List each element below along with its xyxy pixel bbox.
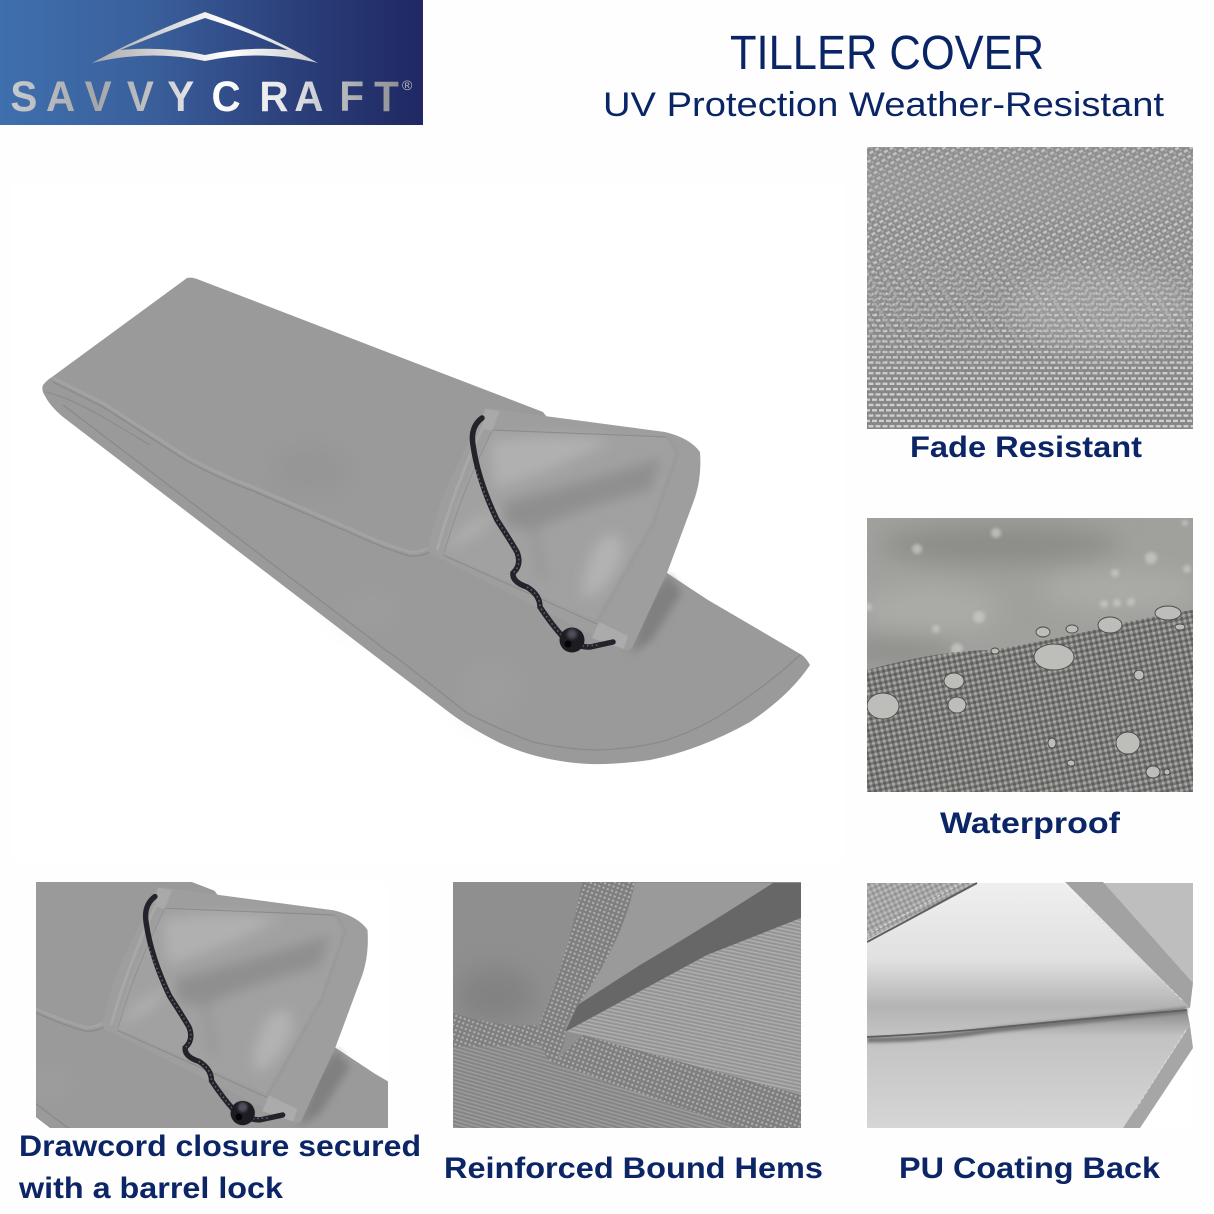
panel: drawcord closure	[18, 882, 419, 1198]
caption: with a barrel lock	[18, 1172, 283, 1205]
panel: fade resistant	[867, 147, 1193, 458]
product image: folded tiller cover	[42, 278, 810, 764]
title: TILLER COVER	[730, 27, 1044, 80]
logo wordmark: SAVVYCRAFT	[10, 72, 399, 120]
photo: droplets on fabric	[840, 518, 1200, 792]
photo: coated interior	[867, 882, 1193, 1128]
panel: PU coating back	[867, 882, 1193, 1185]
photo: hem detail	[453, 882, 801, 1128]
panel: reinforced bound hems	[444, 882, 823, 1185]
logo: Savvycraft	[0, 0, 423, 125]
caption: Reinforced Bound Hems	[444, 1152, 823, 1185]
caption: Waterproof	[940, 807, 1121, 840]
fabric swatch	[867, 147, 1193, 429]
caption: Fade Resistant	[910, 431, 1142, 464]
photo: drawcord detail	[36, 882, 388, 1128]
panel: waterproof	[840, 518, 1200, 840]
registered mark: ®	[402, 77, 413, 93]
caption: PU Coating Back	[899, 1152, 1160, 1185]
caption: Drawcord closure secured	[19, 1130, 421, 1163]
main product panel	[12, 182, 845, 862]
subtitle: UV Protection Weather-Resistant	[603, 86, 1165, 124]
water droplets	[867, 606, 1185, 778]
icon: roof swoosh	[92, 12, 318, 63]
blurred background droplets	[864, 520, 1191, 655]
